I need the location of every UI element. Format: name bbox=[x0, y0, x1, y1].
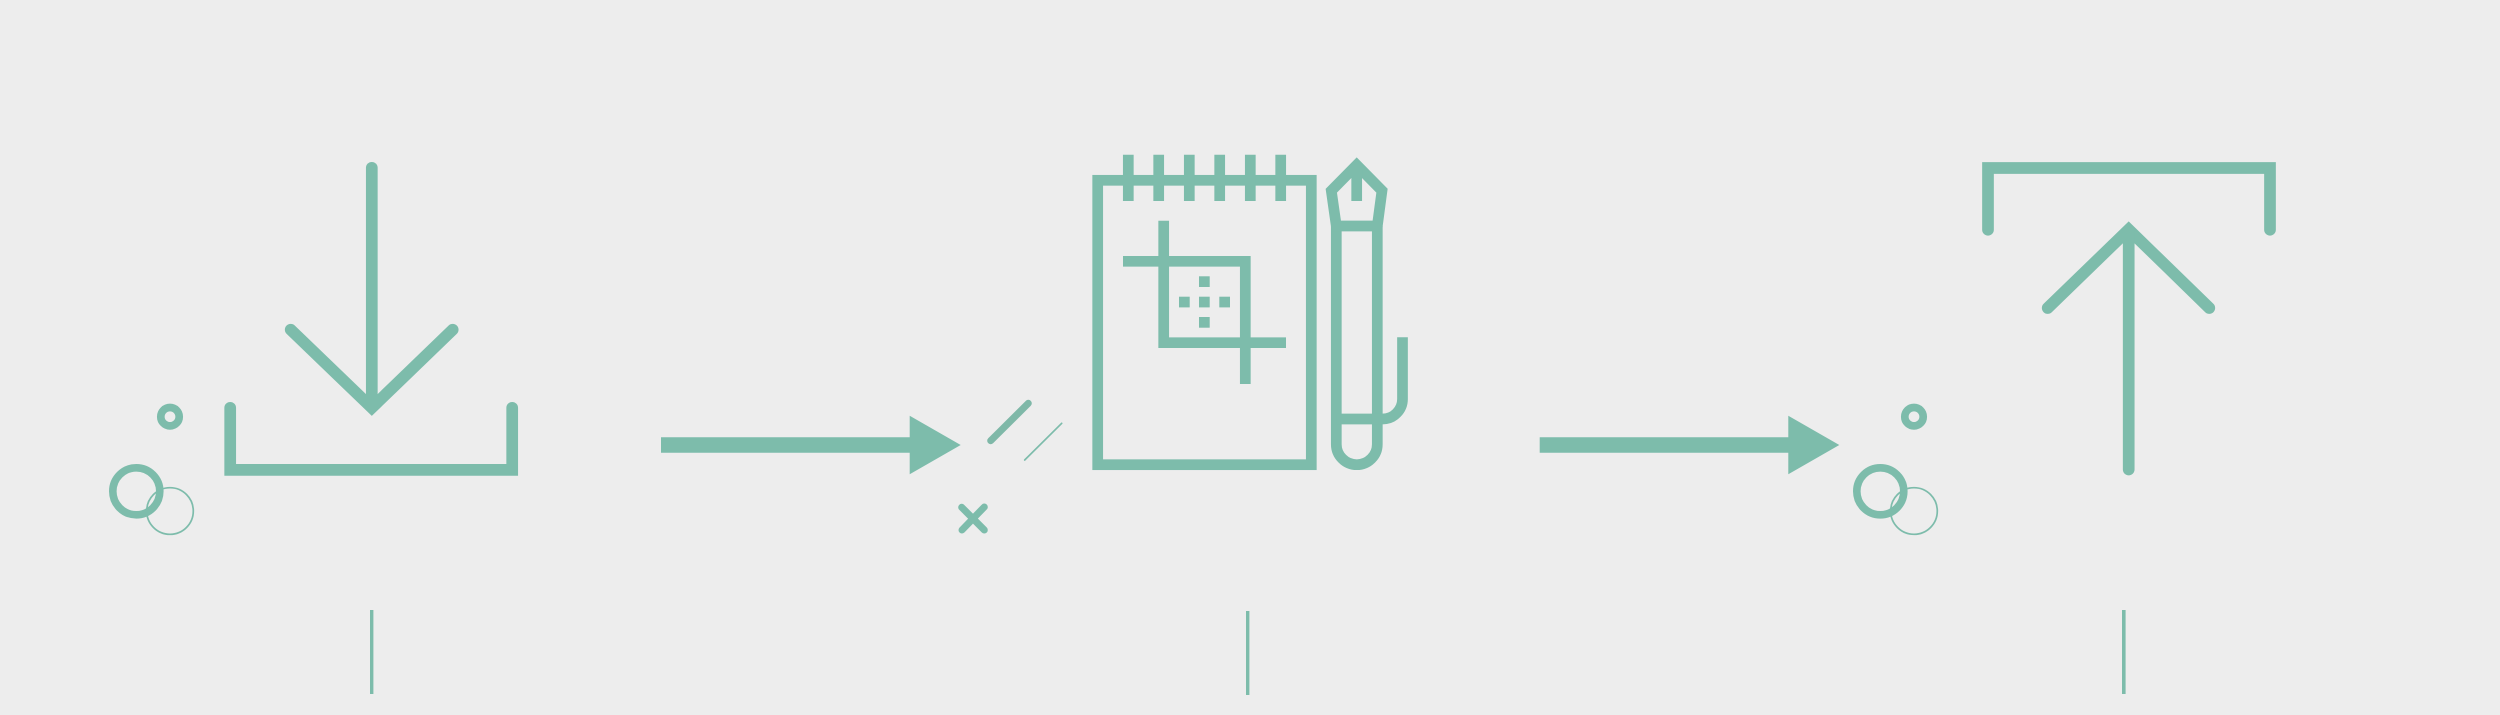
thin ring bbox=[1891, 488, 1937, 534]
notebook spiral bbox=[1128, 155, 1281, 201]
decoration: circles right bbox=[1857, 408, 1937, 534]
pen clip bbox=[1382, 337, 1402, 419]
notebook page bbox=[1098, 180, 1311, 465]
tick line: step two bbox=[1246, 611, 1249, 695]
icon: upload bbox=[1988, 168, 2270, 470]
decoration: slashes and cross bbox=[962, 403, 1062, 530]
download tray bbox=[230, 408, 512, 470]
crop mark bbox=[1123, 221, 1286, 384]
icon: notebook and pen bbox=[1098, 155, 1402, 465]
pen barrel bbox=[1336, 226, 1377, 465]
tick line: step one bbox=[370, 610, 373, 694]
pen nib slit bbox=[1351, 170, 1362, 201]
pen nib bbox=[1331, 165, 1382, 226]
tick line: step three bbox=[2122, 610, 2126, 694]
small ring bbox=[161, 408, 179, 426]
small ring bbox=[1905, 408, 1923, 426]
large ring bbox=[1857, 468, 1904, 515]
download arrow head bbox=[291, 330, 453, 408]
upload tray bbox=[1988, 168, 2270, 230]
arrow: download to edit bbox=[661, 416, 961, 474]
icon: download bbox=[230, 168, 512, 470]
pen band bbox=[1336, 414, 1382, 424]
arrow: edit to upload bbox=[1540, 416, 1839, 474]
large ring bbox=[113, 468, 160, 515]
thin ring bbox=[147, 488, 193, 534]
crop centre dots bbox=[1179, 276, 1230, 328]
thin slash bbox=[1025, 423, 1062, 460]
cross mark bbox=[962, 507, 984, 530]
thick slash bbox=[991, 403, 1028, 441]
decoration: circles left bbox=[113, 408, 193, 534]
upload arrow shaft bbox=[2123, 233, 2135, 470]
upload arrow head bbox=[2048, 230, 2209, 308]
download arrow shaft bbox=[366, 168, 378, 405]
